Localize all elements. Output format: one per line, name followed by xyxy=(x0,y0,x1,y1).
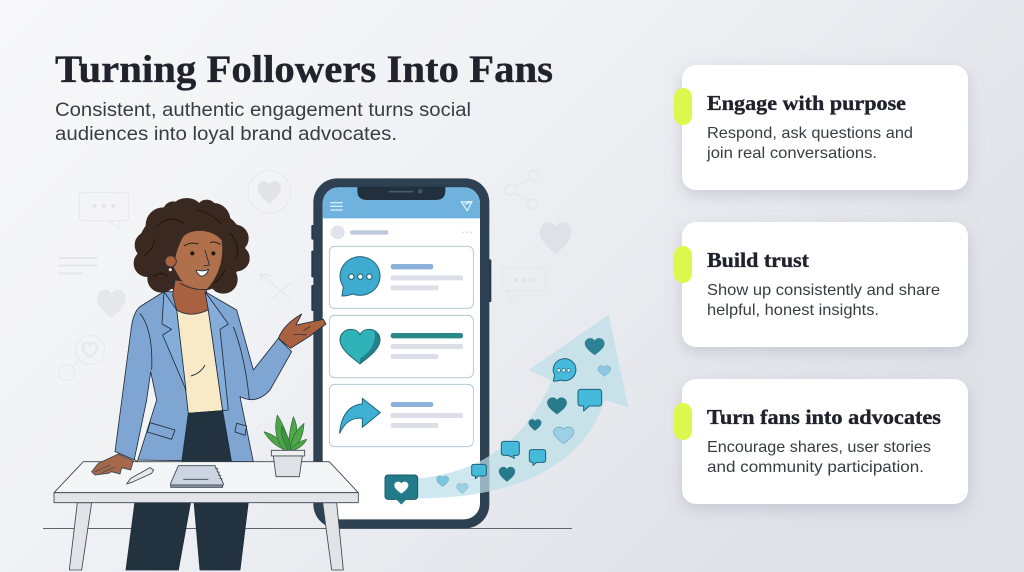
card: engage with purpose: Respond, ask questions and xyxy=(707,125,913,142)
subtitle: Consistent, authentic engagement turns social xyxy=(55,100,471,121)
raised hand xyxy=(278,314,326,348)
desk top xyxy=(54,462,358,493)
card: engage with purpose: Engage with purpose xyxy=(707,91,906,115)
post card: heart xyxy=(329,315,473,378)
heart badge xyxy=(385,475,418,505)
marker pill xyxy=(674,403,692,440)
floating hearts and bubbles xyxy=(437,338,611,493)
desk xyxy=(54,415,358,570)
title: Turning Followers Into Fans xyxy=(55,48,553,91)
top xyxy=(177,310,223,413)
rising engagement arrow xyxy=(385,315,628,505)
phone xyxy=(311,178,491,528)
card: build trust: Show up consistently and share xyxy=(707,282,940,299)
subtitle: audiences into loyal brand advocates. xyxy=(55,124,397,145)
card: build trust: helpful, honest insights. xyxy=(707,302,879,319)
trousers xyxy=(182,411,232,463)
phone body xyxy=(311,178,491,528)
hair xyxy=(134,198,249,293)
woman presenting xyxy=(115,198,326,570)
jacket xyxy=(115,292,292,462)
marker pill xyxy=(674,88,692,125)
marker pill xyxy=(674,246,692,283)
card: turn fans into advocates: Turn fans into advocates xyxy=(707,405,941,429)
post card: comment xyxy=(329,246,473,308)
card: engage with purpose xyxy=(674,65,968,190)
post card: share xyxy=(329,384,473,447)
plant xyxy=(264,415,307,477)
pen xyxy=(127,468,154,484)
notebook xyxy=(171,466,223,487)
gap between arm and torso xyxy=(134,372,157,462)
faint background icons xyxy=(59,171,293,381)
card: turn fans into advocates: and community participation. xyxy=(707,459,924,476)
card: turn fans into advocates xyxy=(674,379,968,504)
card: engage with purpose: join real conversations. xyxy=(706,145,877,162)
card: turn fans into advocates: Encourage shares, user stories xyxy=(707,439,931,456)
arrow shape xyxy=(417,315,628,498)
lapels and pockets xyxy=(162,292,228,411)
face xyxy=(173,231,222,289)
floor line xyxy=(43,528,572,530)
neck xyxy=(173,280,208,314)
card: build trust: Build trust xyxy=(707,248,809,272)
subtitle xyxy=(55,100,471,145)
desk legs xyxy=(69,503,343,570)
card: build trust xyxy=(674,222,968,347)
hand on table xyxy=(92,454,133,475)
